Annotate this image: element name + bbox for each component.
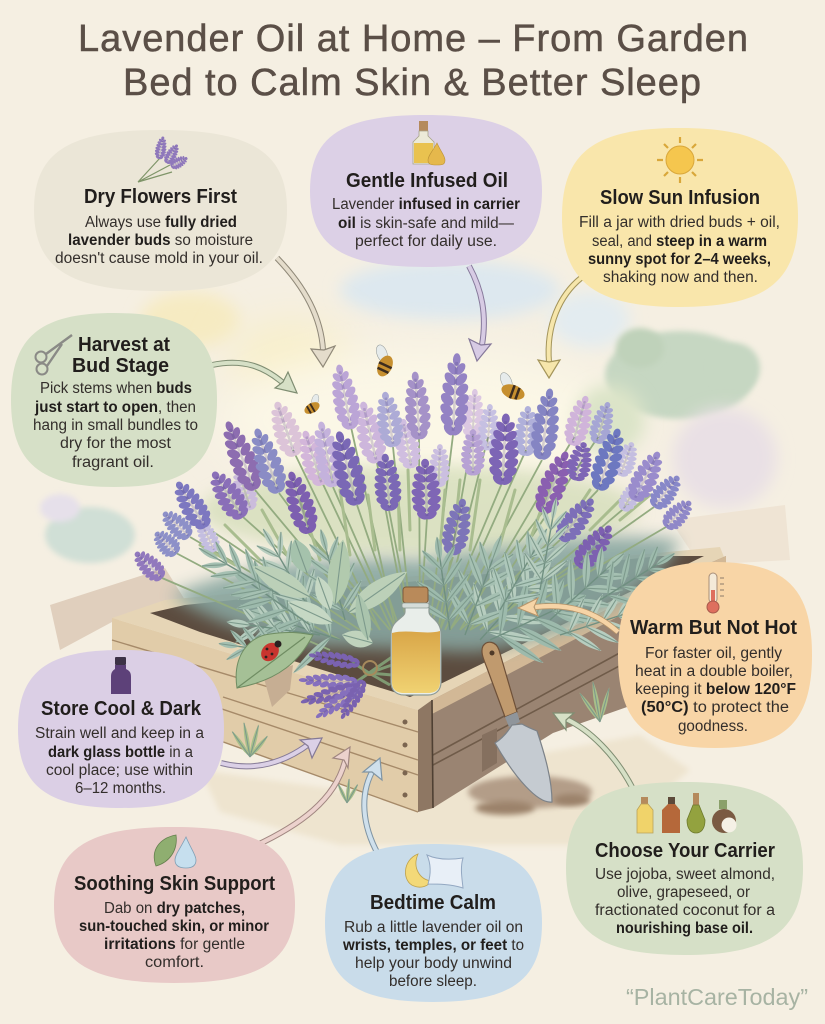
body text: 6–12 months. — [75, 780, 166, 797]
body text: Always use fully dried — [85, 214, 237, 231]
body text — [33, 380, 198, 471]
body text: oil is skin-safe and mild— — [338, 215, 514, 232]
body text: Pick stems when buds — [40, 380, 192, 397]
body text — [79, 900, 269, 971]
lavender plant — [127, 352, 700, 688]
heading: Store Cool & Dark — [41, 697, 202, 720]
arrows — [212, 258, 632, 854]
body text: lavender buds so moisture — [68, 232, 253, 249]
panel: Choose Your Carrier — [566, 782, 803, 955]
green stem haze — [200, 465, 640, 555]
body text: cool place; use within — [46, 762, 193, 779]
body text: Fill a jar with dried buds + oil, — [579, 214, 780, 231]
body text: doesn't cause mold in your oil. — [55, 250, 263, 267]
arrow: Choose Your Carrier to bed — [553, 713, 632, 787]
body text: shaking now and then. — [603, 269, 758, 286]
title: Lavender Oil at Home – From Garden — [78, 18, 748, 60]
body text: dry for the most — [60, 435, 172, 452]
body text: comfort. — [145, 954, 204, 971]
body text: Dab on dry patches, — [104, 900, 245, 917]
arrow: Slow Sun Infusion to plant — [538, 278, 581, 378]
bee: right — [492, 368, 530, 403]
heading: Warm But Not Hot — [630, 616, 797, 639]
body text: nourishing base oil. — [616, 920, 753, 937]
body text: help your body unwind — [355, 955, 512, 972]
icon: carrier oil bottles and coconut — [637, 793, 736, 833]
back spikes — [190, 388, 650, 557]
arrow: Store Cool to bed — [221, 738, 322, 766]
panel: Soothing Skin Support — [54, 827, 295, 983]
arrow: Warm But Not Hot to plant — [518, 598, 618, 632]
bee: left — [299, 391, 326, 416]
arrow: Harvest to plant — [212, 363, 297, 393]
front spikes — [127, 352, 700, 588]
leaf with ladybug — [236, 632, 313, 707]
bees — [299, 340, 530, 416]
panel: Slow Sun Infusion — [562, 128, 798, 307]
body text: heat in a double boiler, — [635, 663, 793, 680]
heading: Harvest at — [78, 333, 170, 356]
icon: oil bottle and drop — [413, 121, 445, 165]
body text: fractionated coconut for a — [595, 902, 775, 919]
body text: For faster oil, gently — [645, 645, 782, 662]
broad sage leaves — [248, 536, 413, 651]
panel: Dry Flowers First — [34, 130, 287, 291]
body text: sunny spot for 2–4 weeks, — [588, 251, 771, 268]
panel: Store Cool & Dark — [18, 650, 224, 808]
heading: Choose Your Carrier — [595, 839, 775, 862]
silver-green branches — [184, 493, 691, 688]
body text: goodness. — [678, 718, 748, 735]
title — [78, 18, 748, 104]
body text — [55, 214, 263, 267]
body text: wrists, temples, or feet to — [342, 937, 524, 954]
body text: irritations for gentle — [104, 936, 245, 953]
heading: Dry Flowers First — [84, 185, 237, 208]
body text: Strain well and keep in a — [35, 725, 204, 742]
icon: sun — [657, 137, 703, 183]
arrow: Bedtime Calm to bed — [363, 758, 382, 854]
body text — [342, 919, 524, 990]
body text: perfect for daily use. — [355, 233, 497, 250]
body text: sun-touched skin, or minor — [79, 918, 269, 935]
heading: Bud Stage — [72, 354, 169, 377]
body text — [595, 866, 775, 937]
heading: Gentle Infused Oil — [346, 169, 508, 192]
body text: just start to open, then — [34, 399, 196, 416]
foliage shadow mass — [170, 537, 680, 652]
essential oil bottle — [391, 587, 441, 695]
panel: Warm But Not Hot — [618, 562, 812, 748]
body text — [635, 645, 796, 735]
icon: leaf and water drop — [154, 835, 196, 868]
arrow: Gentle Infused Oil to plant — [469, 266, 491, 361]
heading — [72, 333, 170, 377]
heading: Bedtime Calm — [370, 891, 496, 914]
body text — [35, 725, 204, 797]
body text — [332, 196, 520, 250]
icon: thermometer — [707, 573, 724, 613]
body text: keeping it below 120°F — [635, 681, 796, 698]
body text: (50°C) to protect the — [641, 699, 789, 716]
body text: Rub a little lavender oil on — [344, 919, 523, 936]
body text: Lavender infused in carrier — [332, 196, 520, 213]
icon: lavender sprig — [138, 135, 190, 182]
icon: scissors — [36, 335, 72, 374]
watermark: “PlantCareToday” — [626, 984, 808, 1010]
body text: before sleep. — [389, 973, 477, 990]
body text: fragrant oil. — [72, 454, 154, 471]
grass tufts — [230, 680, 611, 804]
garden trowel — [482, 642, 552, 802]
dried lavender bundle — [298, 646, 392, 725]
arrow: Soothing Skin to bed — [255, 747, 350, 846]
heading: Slow Sun Infusion — [600, 186, 760, 209]
watercolor garden backdrop — [40, 260, 790, 845]
icon: crescent moon and pillow — [405, 854, 463, 888]
raised wooden garden bed — [112, 547, 726, 812]
body text: seal, and steep in a warm — [592, 233, 767, 250]
lavender stems — [162, 427, 666, 650]
panel: Harvest at Bud Stage — [11, 313, 217, 487]
body text — [579, 214, 780, 286]
body text: dark glass bottle in a — [48, 744, 193, 761]
body text: olive, grapeseed, or — [617, 884, 750, 901]
body text: Use jojoba, sweet almond, — [595, 866, 775, 883]
panel: Gentle Infused Oil — [310, 115, 542, 267]
heading: Soothing Skin Support — [74, 872, 275, 895]
body text: hang in small bundles to — [33, 417, 198, 434]
title: Bed to Calm Skin & Better Sleep — [123, 62, 701, 104]
icon: dark glass bottle — [111, 657, 131, 694]
bee: top center — [364, 340, 400, 379]
panel: Bedtime Calm — [325, 844, 542, 1002]
narrow grass-like leaves — [200, 470, 650, 565]
arrow: Dry Flowers to plant — [277, 258, 335, 367]
